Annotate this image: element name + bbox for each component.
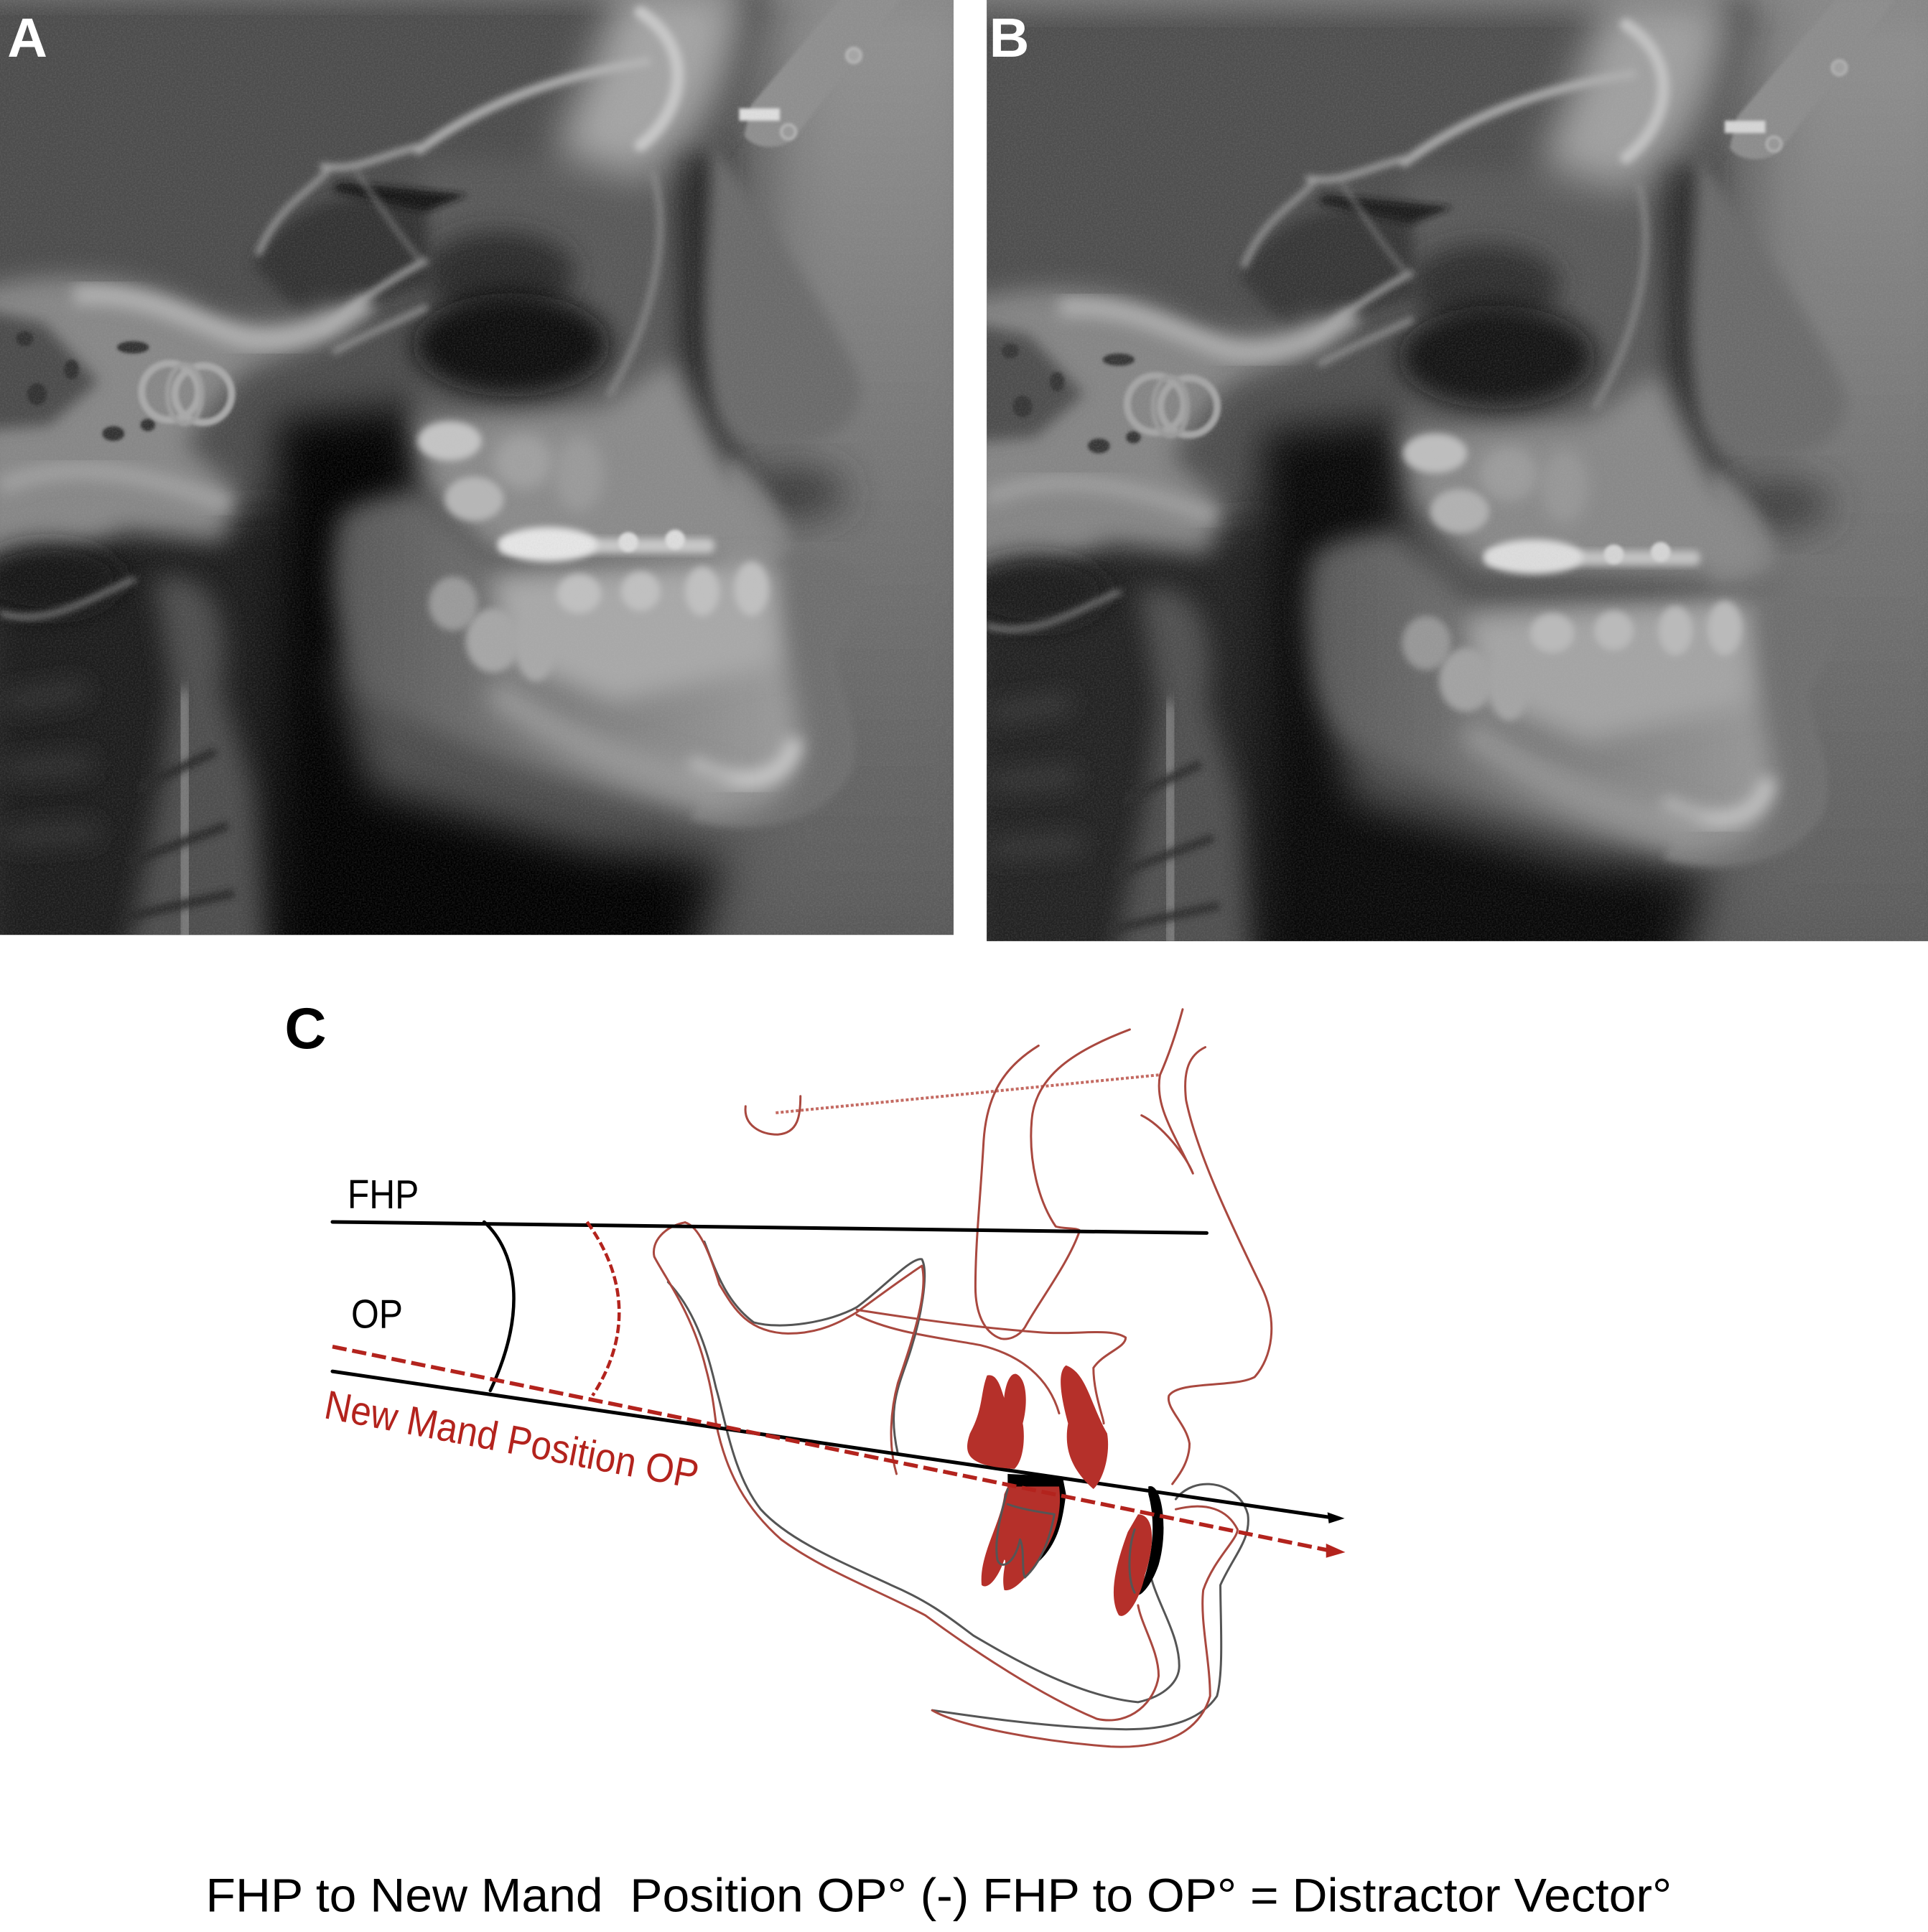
red dashed angle arc [587, 1222, 619, 1396]
label: New Mand Position OP: New Mand Position OP [321, 1382, 702, 1498]
OP line with arrow [332, 1371, 1345, 1523]
panel: A radiograph [0, 0, 954, 935]
lower molar, black original [1007, 1474, 1066, 1570]
panel label: A: A [7, 7, 47, 69]
lower incisor, red new [1114, 1514, 1152, 1616]
black angle arc [484, 1222, 514, 1391]
nasal bone outline [1142, 1009, 1193, 1173]
label: FHP: FHP [348, 1172, 419, 1217]
upper molar [967, 1374, 1026, 1469]
mandible tracing: original, grey [668, 1241, 1248, 1730]
cranial base dotted line [745, 1075, 1159, 1134]
formula caption: FHP to New Mand Position OP° (-) FHP to OP° = Distractor Vector° [206, 1869, 1672, 1922]
new mandibular position dashed OP line with arrow [332, 1347, 1345, 1558]
orbit and maxilla outline [975, 1030, 1130, 1339]
lower molar, red new [982, 1487, 1060, 1590]
panel: C cephalometric tracing [332, 1009, 1345, 1747]
lower incisor, black original [1138, 1486, 1163, 1595]
panel: B radiograph [949, 0, 1928, 998]
facial soft tissue profile [1168, 1047, 1272, 1484]
FHP line [332, 1222, 1206, 1233]
panel label: C: C [284, 997, 327, 1061]
upper incisor [1061, 1366, 1108, 1489]
label: OP: OP [351, 1291, 403, 1336]
panel label: B: B [989, 7, 1029, 69]
palate outline [857, 1310, 1126, 1424]
mandible tracing: new position, red [653, 1223, 1237, 1747]
